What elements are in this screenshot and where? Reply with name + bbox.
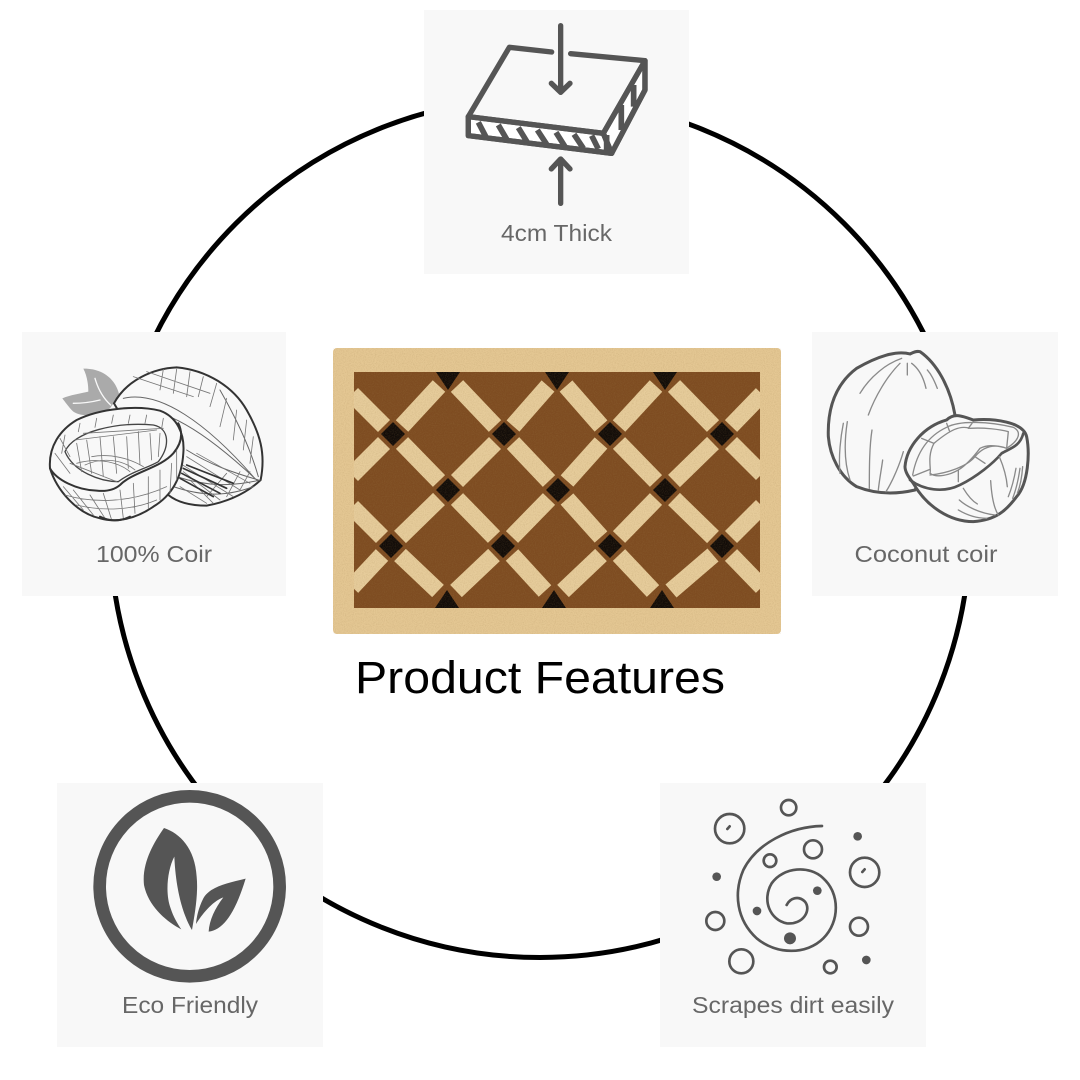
label: Coconut coir: Coconut coir — [854, 541, 998, 567]
icon: leaves — [62, 369, 119, 415]
title: Product Features — [355, 652, 725, 703]
label: Eco Friendly: Eco Friendly — [122, 992, 259, 1018]
icon: leaves in ring — [100, 796, 280, 976]
panel: 100% coir — [22, 332, 286, 596]
icon: compressed mat thickness — [468, 26, 645, 203]
panel: coconut coir — [812, 332, 1058, 596]
label: 4cm Thick: 4cm Thick — [501, 220, 613, 246]
icon: sketched coconut — [50, 367, 263, 520]
icon: outlined coconut — [828, 351, 1028, 522]
label: 100% Coir: 100% Coir — [96, 541, 212, 567]
panel: scrapes dirt easily — [660, 783, 926, 1047]
panel: eco friendly — [57, 783, 323, 1047]
coir fibre texture — [333, 348, 781, 634]
icon: spiral with dirt specks — [706, 800, 879, 973]
ring connecting the features — [110, 98, 970, 958]
lattice pattern — [352, 372, 762, 608]
mat border — [333, 348, 781, 634]
label: Scrapes dirt easily: Scrapes dirt easily — [692, 992, 895, 1018]
product image: coir doormat — [333, 348, 781, 634]
panel: 4cm thick — [424, 10, 689, 274]
mat brown field — [354, 372, 760, 608]
